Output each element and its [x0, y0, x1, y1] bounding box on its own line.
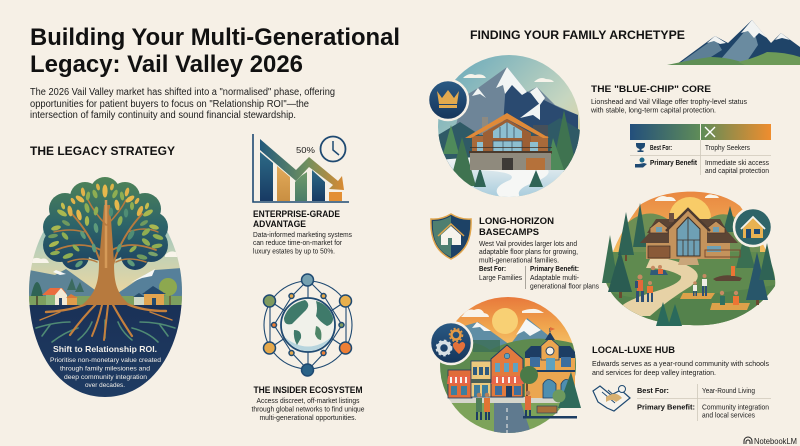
text: enterprise-grade advantage: luxury estates by up to 50%. [253, 248, 335, 256]
intro paragraph: intersection of family continuity and sound financial stewardship. [30, 110, 296, 121]
text: enterprise-grade advantage: ADVANTAGE [253, 219, 306, 229]
icon: house shield [431, 214, 471, 259]
text: the blue-chip core [590, 84, 747, 114]
tree caption: deep community integration [64, 374, 147, 381]
text: the blue-chip core: Lionshead and Vail Village offer trophy-level status [591, 99, 747, 106]
tree caption: over decades. [85, 382, 125, 389]
text: local-luxe hub: Edwards serves as a year-round community with schools [592, 359, 769, 368]
panel: blue-chip core illustration [428, 55, 580, 197]
text: the blue-chip core: with stable, long-term capital protection. [590, 108, 716, 114]
icon: globe network [264, 274, 352, 376]
text: the insider ecosystem: THE INSIDER ECOSYSTEM [254, 385, 362, 395]
text: local-luxe hub: and services for deep valley integration. [592, 368, 716, 377]
table: local-luxe hub: and local services [702, 412, 755, 420]
text: enterprise-grade advantage [253, 209, 352, 256]
tree caption: through family milesiones and [60, 366, 150, 372]
panel: long-horizon basecamps illustration [602, 192, 776, 326]
building: orange store [491, 345, 524, 397]
text: enterprise-grade advantage: Data-informed marketing systems [253, 232, 352, 239]
building: yellow store [471, 361, 492, 397]
table: local-luxe hub: Year-Round Living [702, 388, 755, 395]
text: long-horizon basecamps: adaptable floor plans for growing, [479, 249, 578, 256]
house [640, 209, 740, 265]
table: local-luxe hub: Primary Benefit: [637, 404, 695, 412]
intro paragraph: The 2026 Vail Valley market has shifted into a "normalised" phase, offering [30, 87, 335, 98]
icon: house badge [734, 208, 772, 246]
text: long-horizon basecamps: Primary Benefit: [530, 266, 579, 273]
icon: gears and heart badge [430, 322, 472, 364]
text: long-horizon basecamps: multi-generational families. [479, 258, 559, 264]
title: Building Your Multi-Generational [30, 24, 400, 51]
icon: falling bar chart with clock: 50% [296, 145, 315, 155]
text: local-luxe hub: LOCAL-LUXE HUB [592, 345, 675, 356]
text: enterprise-grade advantage: ENTERPRISE-GRADE [253, 209, 340, 219]
table: blue-chip core [630, 124, 771, 175]
table: local-luxe hub: Best For: [637, 388, 669, 395]
building: shop [447, 370, 473, 398]
table: blue-chip core: Immediate ski access [705, 160, 769, 167]
icon: falling bar chart with clock [253, 134, 349, 202]
text: long-horizon basecamps: LONG-HORIZON [479, 216, 554, 227]
tree caption: Shift to Relationship ROI. [53, 345, 157, 354]
text: local-luxe hub [592, 345, 769, 377]
title: Legacy: Vail Valley 2026 [30, 51, 303, 78]
icon: mountain range [667, 20, 800, 65]
table: blue-chip core: Primary Benefit [650, 160, 698, 167]
text: long-horizon basecamps [479, 216, 599, 290]
people group [635, 265, 750, 310]
table: local-luxe hub [637, 384, 771, 421]
text: the insider ecosystem [252, 385, 365, 422]
text: long-horizon basecamps: generational floor plans [530, 284, 599, 290]
table: blue-chip core: Trophy Seekers [705, 145, 750, 152]
intro paragraph: opportunities for patient buyers to focus on "Relationship ROI"—the [30, 99, 310, 110]
table: local-luxe hub: Community integration [702, 404, 769, 412]
title [30, 24, 400, 78]
text: long-horizon basecamps: Best For: [479, 266, 506, 273]
people and bench [476, 391, 577, 420]
icon: crown badge [428, 80, 468, 120]
heading: finding your family archetype: FINDING YOUR FAMILY ARCHETYPE [470, 28, 685, 42]
text: long-horizon basecamps: Large Families [479, 275, 522, 282]
text: enterprise-grade advantage: can reduce time-on-market for [253, 240, 343, 247]
building: town hall [525, 327, 575, 398]
table: blue-chip core: and capital protection [705, 168, 769, 175]
tree caption: Prioritise non-monetary value created [50, 357, 161, 364]
text: the blue-chip core: THE "BLUE-CHIP" CORE [591, 84, 711, 95]
text: the insider ecosystem: through global networks to find unique [252, 406, 365, 414]
table: blue-chip core: Best For: [650, 145, 672, 152]
text: the insider ecosystem: Access discreet, off-market listings [256, 398, 360, 405]
icon: handshake [593, 386, 630, 411]
logo: NotebookLM: NotebookLM [754, 437, 797, 446]
text: the insider ecosystem: multi-generational opportunities. [260, 415, 357, 422]
text: long-horizon basecamps: West Vail provides larger lots and [479, 241, 577, 248]
panel: local-luxe hub illustration [430, 297, 581, 436]
heading: the legacy strategy: THE LEGACY STRATEGY [30, 144, 175, 158]
text: long-horizon basecamps: Adaptable multi- [530, 275, 580, 282]
tree caption [50, 345, 161, 389]
text: long-horizon basecamps: BASECAMPS [479, 227, 539, 238]
panel: legacy tree illustration [29, 177, 182, 400]
intro paragraph [30, 87, 335, 121]
